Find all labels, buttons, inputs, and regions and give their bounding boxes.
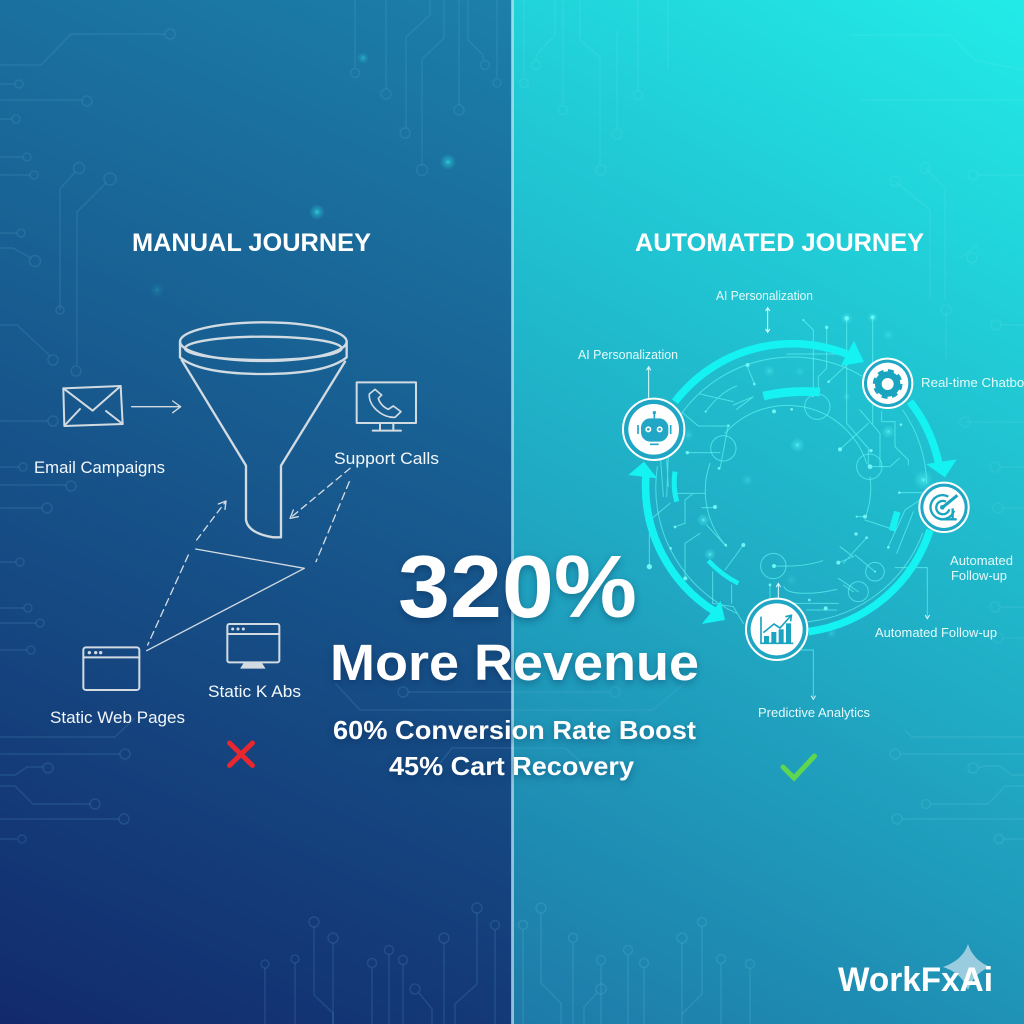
label: automated follow-up stacked: Follow-up [951,568,1007,583]
thick cycle arc 4 with arrows [628,462,725,624]
icon: gear node [863,359,912,408]
arrow: web pages to funnel [197,501,226,540]
panel: automated cycle diagram [623,308,969,699]
icon: funnel [180,322,347,537]
label: ai personalization top: AI Personalization [716,288,813,303]
icon: red cross [230,743,252,766]
icon: robot node [623,399,684,460]
label: static web pages: Static Web Pages [50,708,185,727]
label: real-time chatbot: Real-time Chatbot [921,375,1024,390]
solid connector lines [147,549,304,651]
panel: manual funnel diagram [63,322,416,690]
arrow: support calls to funnel [290,468,350,518]
dashed connector lower [148,555,188,645]
trace node dots [647,315,902,610]
label: automated follow-up stacked [950,553,1013,583]
label: support calls: Support Calls [334,449,439,468]
logo: WorkFxAi: WorkFxAi [838,961,993,999]
icon: target node [919,483,969,532]
dashed connector [316,482,349,562]
thick cycle arc 2 with arrow [910,402,957,477]
logo: WorkFxAi [838,944,993,999]
stat: 320%: 320% [398,537,637,636]
label: ai personalization left: AI Personalization [578,347,678,362]
stat: conversion rate boost: 60% Conversion Rate Boost [333,715,696,745]
stat: cart recovery: 45% Cart Recovery [389,751,635,781]
icon: support phone monitor [357,382,416,431]
label: predictive analytics: Predictive Analytics [758,705,870,720]
thin circuit rings and traces [649,317,927,697]
label: static ads: Static K Abs [208,682,301,701]
icon: static ads monitor [227,624,279,668]
icon: envelope [63,386,123,426]
label: email campaigns: Email Campaigns [34,458,165,477]
heading: manual journey: MANUAL JOURNEY [132,229,371,257]
label: automated follow-up: Automated Follow-up [875,625,997,640]
icon: green check [783,756,814,778]
thick cycle arc 3 [808,530,930,632]
inner thick segments [674,391,897,583]
small callout arrows [647,308,929,699]
arrow: email to funnel [132,401,181,413]
icon: chart node [746,599,807,660]
icon: static web page window [83,647,139,690]
stat: more revenue: More Revenue [330,634,699,691]
center divider [511,0,514,1024]
label: automated follow-up stacked: Automated [950,553,1013,568]
heading: automated journey: AUTOMATED JOURNEY [635,229,924,257]
thick cycle arc 1 with arrow [675,341,864,402]
panel: automated journey background [512,0,1024,1024]
panel: manual journey background [0,0,512,1024]
glow sparkles [682,312,933,639]
background glow dots [150,52,456,297]
